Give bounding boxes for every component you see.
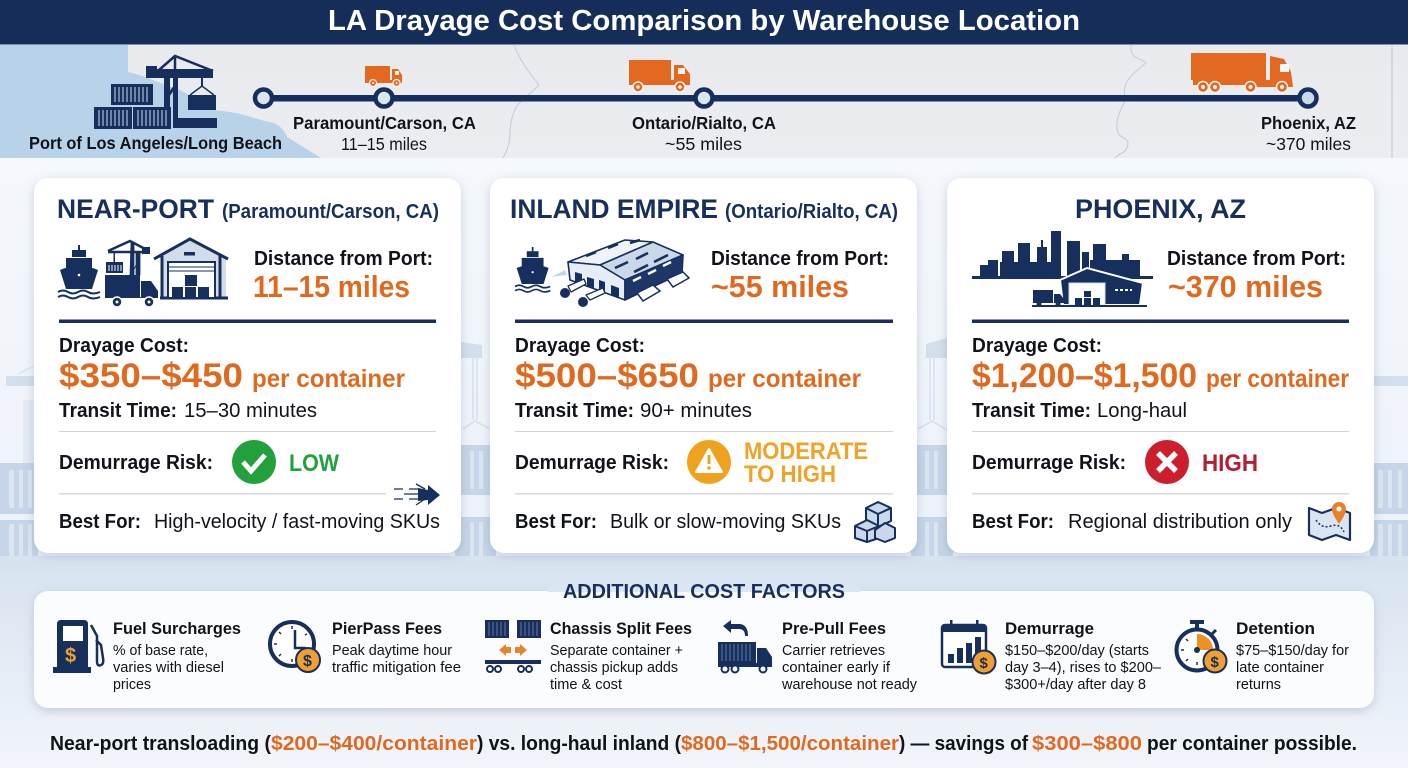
demurrage risk: MODERATE [744, 438, 868, 465]
demurrage risk: HIGH [1202, 450, 1258, 477]
factor: pre-pull fees [718, 619, 918, 693]
heading: NEAR-PORT [57, 194, 214, 224]
warehouse roof [568, 240, 683, 300]
timeline labels: Port of Los Angeles/Long Beach [29, 133, 282, 153]
distance: 11–15 miles [253, 269, 410, 304]
state borders [503, 45, 1146, 158]
drayage cost: per container [1206, 365, 1349, 393]
icon: map pin [1309, 502, 1350, 540]
timeline labels: 11–15 miles [341, 134, 427, 154]
summary callout: per container possible. [1147, 732, 1357, 755]
best for: Bulk or slow-moving SKUs [610, 510, 841, 533]
drayage cost: per container [708, 365, 861, 393]
factor: chassis split fees: chassis pickup adds [550, 660, 678, 676]
factor: pierpass fees: PierPass Fees [332, 619, 442, 638]
summary callout: ) — savings of [899, 732, 1028, 755]
panel: inland empire [490, 178, 917, 553]
distance: Distance from Port: [711, 247, 889, 270]
factor: fuel surcharges: Fuel Surcharges [113, 619, 241, 638]
distance: ~55 miles [711, 269, 849, 304]
factor: chassis split fees: Chassis Split Fees [550, 619, 692, 638]
demurrage risk: Demurrage Risk: [59, 451, 213, 474]
factor: detention: returns [1236, 677, 1281, 693]
heading: ADDITIONAL COST FACTORS [563, 580, 845, 603]
icon: fuel pump [53, 620, 103, 673]
best for: Best For: [515, 510, 597, 533]
icon: stopwatch with coin: $ [1210, 654, 1220, 671]
factor: demurrage [942, 619, 1162, 693]
summary callout [50, 732, 1357, 755]
icon: medium truck [629, 60, 690, 92]
transit time: Transit Time: [515, 399, 634, 422]
icon: skyline and warehouse [972, 231, 1153, 307]
route map band [0, 45, 1408, 158]
page background [0, 158, 1408, 768]
demurrage risk: TO HIGH [744, 461, 836, 488]
header bar [0, 0, 1408, 44]
factor: pre-pull fees: container early if [782, 660, 891, 676]
drayage cost [972, 334, 1349, 395]
drayage cost: Drayage Cost: [972, 334, 1102, 357]
factor: pre-pull fees: warehouse not ready [781, 677, 918, 693]
factor: fuel surcharges: varies with diesel [113, 660, 224, 676]
summary callout: $800–$1,500/container [681, 732, 899, 755]
timeline labels: Ontario/Rialto, CA [632, 113, 776, 133]
summary callout: $200–$400/container [271, 732, 477, 755]
transit time [515, 399, 752, 422]
icon: small truck [365, 66, 402, 86]
summary callout: Near-port transloading ( [50, 732, 271, 755]
factor: fuel surcharges [53, 619, 241, 693]
demurrage risk [59, 440, 339, 484]
icon: calendar with coin [942, 620, 996, 674]
factor: fuel surcharges: prices [113, 677, 151, 693]
transit time [972, 399, 1187, 422]
factor: demurrage: day 3–4), rises to $200– [1005, 660, 1162, 676]
icon: calendar with coin: $ [980, 655, 988, 672]
timeline labels: ~370 miles [1266, 134, 1351, 154]
summary callout: ) vs. long-haul inland ( [477, 732, 681, 755]
heading: (Ontario/Rialto, CA) [725, 201, 898, 223]
timeline nodes [255, 90, 1316, 106]
icon: split chassis [485, 620, 541, 672]
best for: Best For: [972, 510, 1054, 533]
panel: phoenix [947, 178, 1374, 553]
distance: Distance from Port: [1167, 247, 1346, 270]
heading: PHOENIX, AZ [1075, 194, 1246, 224]
transit time [59, 399, 317, 422]
factor: chassis split fees [485, 619, 692, 693]
factor: detention: Detention [1236, 619, 1315, 638]
icon: large truck [1191, 53, 1293, 92]
title: LA Drayage Cost Comparison by Warehouse Location [328, 5, 1080, 37]
drayage cost: Drayage Cost: [59, 334, 189, 357]
drayage cost: Drayage Cost: [515, 334, 645, 357]
factor: chassis split fees: time & cost [550, 677, 622, 693]
panel: additional cost factors [34, 580, 1374, 708]
icon: clock with coin: $ [303, 653, 312, 670]
transit time: Transit Time: [972, 399, 1091, 422]
distance [1167, 247, 1346, 304]
icon: ship and warehouse [515, 240, 689, 307]
factor: fuel surcharges: % of base rate, [113, 643, 208, 659]
drayage cost: per container [252, 365, 405, 393]
distance: Distance from Port: [254, 247, 433, 270]
best for [972, 510, 1293, 533]
best for: Best For: [59, 510, 141, 533]
best for: High-velocity / fast-moving SKUs [154, 510, 440, 533]
summary callout: $300–$800 [1032, 732, 1142, 755]
icon: stopwatch with coin [1176, 620, 1226, 672]
icon: boxes [855, 502, 895, 542]
icon: truck with return arrow [718, 620, 772, 672]
timeline labels: ~55 miles [665, 134, 742, 154]
icon: port crane and containers [94, 56, 217, 129]
factor: chassis split fees: Separate container + [550, 643, 683, 659]
factor: detention [1176, 619, 1349, 693]
drayage cost: $500–$650 [515, 357, 699, 395]
factor: demurrage: $300+/day after day 8 [1005, 677, 1146, 693]
factor: pre-pull fees: Carrier retrieves [782, 643, 885, 659]
background: faint port scene [0, 338, 1408, 768]
distance [253, 247, 433, 304]
factor: pierpass fees [270, 619, 461, 676]
demurrage risk: Demurrage Risk: [972, 451, 1126, 474]
drayage cost [515, 334, 861, 395]
drayage cost: $350–$450 [59, 357, 243, 395]
distance [711, 247, 889, 304]
demurrage risk: Demurrage Risk: [515, 451, 669, 474]
icon: fast arrow [394, 484, 440, 505]
factor: pierpass fees: traffic mitigation fee [332, 660, 461, 676]
factor: pierpass fees: Peak daytime hour [332, 643, 452, 659]
demurrage risk [972, 440, 1258, 484]
heading: INLAND EMPIRE [510, 194, 718, 224]
factor: detention: late container [1236, 660, 1324, 676]
transit time: Long-haul [1097, 399, 1187, 422]
transit time: 15–30 minutes [184, 399, 317, 422]
demurrage risk: LOW [289, 450, 339, 477]
best for: Regional distribution only [1068, 510, 1293, 533]
factor: demurrage: $150–$200/day (starts [1005, 643, 1149, 659]
factor: demurrage: Demurrage [1005, 619, 1094, 638]
timeline line [263, 95, 1308, 102]
heading [510, 194, 898, 224]
distance: ~370 miles [1168, 269, 1323, 304]
factor: detention: $75–$150/day for [1236, 643, 1349, 659]
drayage cost: $1,200–$1,500 [972, 357, 1197, 395]
best for [515, 510, 841, 533]
timeline labels [29, 113, 1356, 154]
panel: near-port [34, 178, 461, 553]
heading: (Paramount/Carson, CA) [222, 201, 439, 223]
ocean [0, 45, 321, 158]
drayage cost [59, 334, 405, 395]
transit time: 90+ minutes [640, 399, 752, 422]
icon: clock with coin [270, 622, 320, 672]
icon: fuel pump: $ [65, 645, 76, 667]
icon: ship, crane, truck, warehouse [58, 239, 228, 307]
factor: pre-pull fees: Pre-Pull Fees [782, 619, 886, 638]
demurrage risk [515, 438, 868, 488]
heading [57, 194, 439, 224]
transit time: Transit Time: [59, 399, 177, 422]
timeline labels: Phoenix, AZ [1261, 113, 1356, 133]
timeline labels: Paramount/Carson, CA [293, 113, 476, 133]
